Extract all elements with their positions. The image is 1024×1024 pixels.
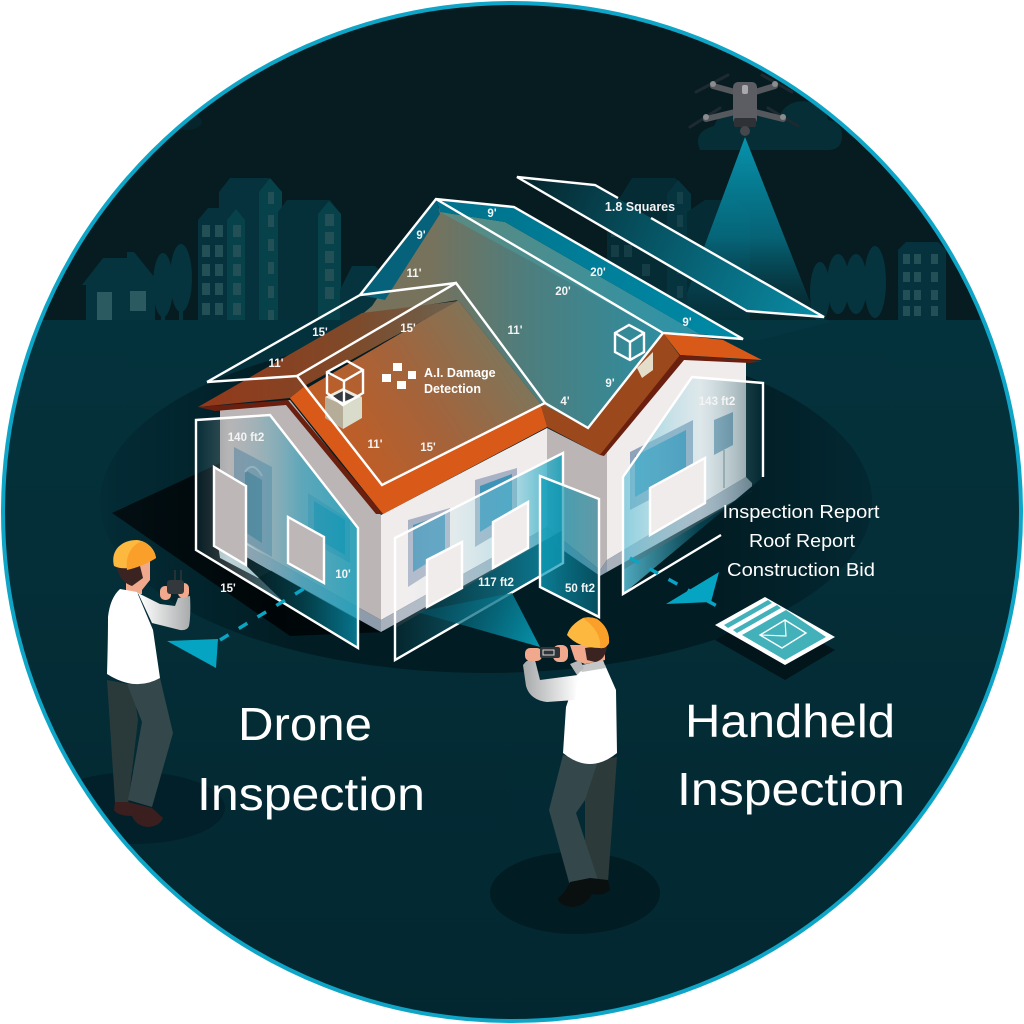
text: A.I. Damage Detection: Detection xyxy=(424,382,481,396)
shoes xyxy=(558,878,610,907)
right trees xyxy=(810,246,886,322)
window panel 1 xyxy=(427,542,462,607)
front roof surface xyxy=(290,300,547,514)
wall panel: 143 ft2 xyxy=(623,377,763,594)
measurement labels: 15' xyxy=(420,442,436,454)
measurement labels: 4' xyxy=(560,396,570,408)
measurement labels: 9' xyxy=(416,230,426,242)
far sleeve xyxy=(570,660,584,675)
head xyxy=(120,560,150,590)
collar xyxy=(578,660,606,672)
measurement labels: 15' xyxy=(400,323,416,335)
back roof cyan band xyxy=(436,199,743,339)
small house behind roof xyxy=(340,266,378,320)
clouds xyxy=(170,101,842,150)
band between roof lines xyxy=(440,212,700,334)
shoes xyxy=(114,802,163,827)
arrow head left xyxy=(167,639,218,668)
heading: Drone Inspection: Inspection xyxy=(197,768,425,820)
report document icon xyxy=(715,597,835,680)
left city skyline xyxy=(82,178,395,324)
left rake underside xyxy=(198,400,383,514)
sleeve xyxy=(523,660,578,702)
left rake brown xyxy=(198,301,458,407)
shirt xyxy=(563,665,617,764)
right city skyline xyxy=(607,178,946,322)
wall panel: 117 ft2 xyxy=(395,453,563,660)
measurement labels: 11' xyxy=(269,358,284,370)
measurement labels: 11' xyxy=(508,325,523,337)
orange eave strip xyxy=(290,385,547,514)
hair xyxy=(117,566,143,586)
roof measurement outlines xyxy=(207,199,743,485)
text: A.I. Damage Detection: A.I. Damage xyxy=(424,366,496,380)
measurement labels: 50 ft2 xyxy=(565,583,595,595)
front window two xyxy=(475,468,517,547)
drone sensor xyxy=(742,85,748,94)
arms xyxy=(706,86,783,119)
heading: Handheld Inspection xyxy=(677,695,905,815)
gable wall xyxy=(220,400,381,620)
electric box xyxy=(714,412,733,488)
measurement labels: 15' xyxy=(220,583,236,595)
neck xyxy=(126,580,142,594)
person with drone controller xyxy=(107,540,190,827)
house cast shadow xyxy=(112,462,385,636)
wall panel: 50 ft2 xyxy=(540,476,599,617)
controller xyxy=(167,570,184,594)
door panel xyxy=(214,467,246,565)
hands xyxy=(160,583,189,600)
night sky xyxy=(42,5,982,320)
person shadow left xyxy=(82,772,225,844)
measurement labels xyxy=(220,200,735,595)
drone body lower xyxy=(734,118,756,127)
arrow: house to report dashes xyxy=(630,558,726,611)
front wall xyxy=(381,428,547,620)
measurement labels: 11' xyxy=(407,268,422,280)
left roof strip teal xyxy=(360,199,440,300)
wall panel: 140 ft2 xyxy=(196,415,358,648)
helmet xyxy=(113,540,156,568)
person shadow right xyxy=(490,852,660,934)
window panel right xyxy=(650,458,705,535)
output list text: Construction Bid xyxy=(727,560,875,580)
measurement labels: 1.8 Squares xyxy=(605,200,675,214)
head xyxy=(570,645,605,664)
helmet panel xyxy=(583,617,609,648)
front wall base xyxy=(381,527,547,632)
recess wall xyxy=(547,428,607,570)
ground ellipse shadow xyxy=(100,331,872,673)
measurement labels: 11' xyxy=(368,439,383,451)
measurement labels: 9' xyxy=(487,208,497,220)
right wing base xyxy=(607,477,752,572)
heading: Drone Inspection: Drone xyxy=(238,698,372,750)
heading: Handheld Inspection: Inspection xyxy=(677,763,905,815)
output list text: Roof Report xyxy=(749,531,855,551)
sleeve xyxy=(138,593,190,630)
measurement labels: 143 ft2 xyxy=(699,396,735,408)
drone xyxy=(690,75,798,136)
right wing wall xyxy=(607,356,746,560)
gable window xyxy=(308,493,350,563)
drone camera cone xyxy=(687,137,827,320)
house xyxy=(198,199,762,632)
front steps xyxy=(218,544,271,578)
front window one xyxy=(408,508,450,587)
right roof underside xyxy=(600,355,762,456)
trousers back leg xyxy=(107,680,138,805)
floating roof plane xyxy=(517,177,824,317)
drone body xyxy=(733,82,757,124)
propellers xyxy=(690,75,798,127)
phone xyxy=(540,647,560,658)
measurement labels: 117 ft2 xyxy=(478,577,514,589)
recess base xyxy=(547,527,607,576)
heading: Handheld Inspection: Handheld xyxy=(685,695,895,747)
arrow: drone to house dashes xyxy=(220,588,305,640)
heading: Drone Inspection xyxy=(197,698,425,820)
trees xyxy=(153,244,192,322)
left house silhouette xyxy=(82,252,155,322)
arrow head right xyxy=(666,572,719,604)
gable base xyxy=(247,545,381,632)
measurement labels: 15' xyxy=(312,327,328,339)
measurement labels: 20' xyxy=(590,267,606,279)
trousers back leg xyxy=(585,757,617,882)
person with phone xyxy=(523,617,617,907)
wireframe cube on rear chimney xyxy=(615,325,644,360)
right roof brown xyxy=(540,333,680,455)
apartment towers xyxy=(198,178,341,324)
right tower xyxy=(898,242,946,322)
measurement labels: 9' xyxy=(682,317,692,329)
measurement labels: 10' xyxy=(335,569,351,581)
output list text: Inspection Report xyxy=(722,502,880,522)
window panel xyxy=(288,517,324,583)
gable window glass xyxy=(314,501,345,555)
measurement labels: 20' xyxy=(555,286,571,298)
hair xyxy=(585,645,607,662)
shirt xyxy=(107,589,160,684)
chimney xyxy=(325,388,362,429)
helmet xyxy=(567,617,609,648)
measurement labels: 9' xyxy=(605,378,615,390)
ground xyxy=(0,320,1024,1024)
measurement labels: 140 ft2 xyxy=(228,432,264,444)
hands xyxy=(525,645,568,662)
icon: damage detection squares xyxy=(382,363,416,389)
right wing window xyxy=(630,420,693,510)
helmet panel xyxy=(127,541,156,570)
handheld camera beam xyxy=(417,593,540,647)
wireframe cube on chimney xyxy=(327,361,363,405)
rear chimney xyxy=(637,352,653,378)
trousers front leg xyxy=(549,755,598,886)
drone camera xyxy=(740,126,750,136)
rotors xyxy=(703,81,786,120)
output list text xyxy=(722,502,880,580)
window panel 2 xyxy=(493,502,528,568)
front door xyxy=(234,447,272,557)
right roof orange xyxy=(663,333,762,360)
back roof surface xyxy=(360,208,664,430)
trousers front leg xyxy=(127,678,173,807)
